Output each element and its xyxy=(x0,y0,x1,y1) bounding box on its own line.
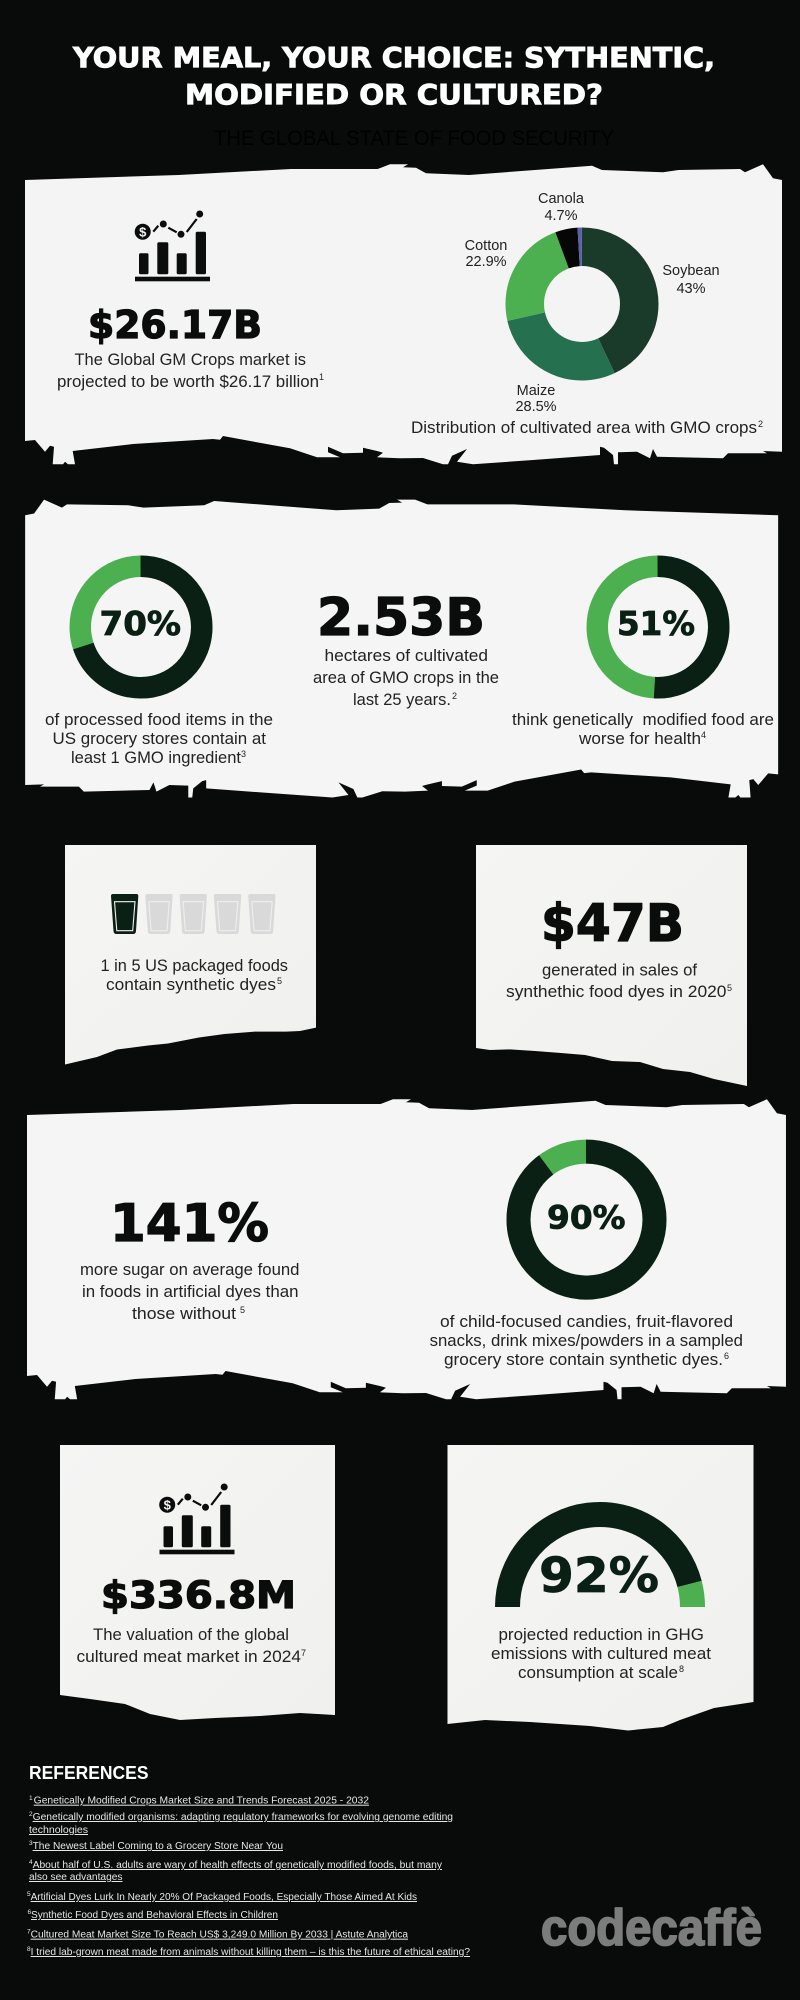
references list: Synthetic Food Dyes and Behavioral Effects in Children xyxy=(31,1910,278,1921)
icon: growth chart: $ xyxy=(139,224,147,240)
icon: growth chart: $ xyxy=(164,1498,172,1512)
panel: GM crops market xyxy=(25,164,782,464)
icon: growth chart xyxy=(135,210,210,281)
text: hectares xyxy=(313,647,499,709)
text: valuation: cultured meat market in 2024 xyxy=(76,1648,301,1666)
text: GHG: consumption at scale xyxy=(518,1664,678,1682)
chart labels: 28.5% xyxy=(515,399,557,415)
references list: 6 xyxy=(28,1909,32,1916)
text: child foods: grocery store contain synthetic dyes. xyxy=(444,1351,723,1369)
chart labels xyxy=(465,191,720,415)
text: processed food: US grocery stores contain at xyxy=(52,730,266,748)
chart labels: Soybean xyxy=(662,263,720,279)
text: market description: 1 xyxy=(319,372,324,382)
title: MODIFIED OR CULTURED? xyxy=(185,80,603,111)
text: GHG xyxy=(491,1626,711,1682)
text: processed food: 3 xyxy=(241,749,246,759)
logo: codecaffè: codecaffè xyxy=(541,1899,762,1956)
panel: synthetic dyes ratio xyxy=(65,845,316,1064)
donut: 70% xyxy=(80,566,202,688)
chart caption: 2 xyxy=(758,419,763,429)
text: market description xyxy=(57,351,324,391)
text: health perception xyxy=(512,711,774,748)
references list: 5 xyxy=(27,1891,31,1898)
references list: also see advantages xyxy=(29,1872,122,1883)
text: GHG: 8 xyxy=(679,1664,684,1674)
donut: 70%: 70% xyxy=(100,604,181,643)
donut: 51%: 51% xyxy=(617,604,695,643)
gauge: 92% xyxy=(508,1514,692,1607)
text: processed food: least 1 GMO ingredient xyxy=(71,749,241,767)
chart labels: 4.7% xyxy=(544,208,578,224)
text: packaged foods: contain synthetic dyes xyxy=(106,976,276,994)
references list: The Newest Label Coming to a Grocery Store Near You xyxy=(33,1841,283,1852)
references list: Genetically modified organisms: adapting regulatory frameworks for evolving genome editing xyxy=(33,1812,453,1823)
text: hectares: last 25 years. xyxy=(353,691,451,709)
text: market description: projected to be worth $26.17 billion xyxy=(57,373,319,391)
text: health perception: 4 xyxy=(701,730,706,740)
text: dye sales: generated in sales of xyxy=(542,962,697,980)
text: dye sales: synthethic food dyes in 2020 xyxy=(506,983,726,1001)
text: processed food xyxy=(45,711,273,767)
references list: 1 xyxy=(29,1795,33,1802)
text: dye sales xyxy=(506,962,732,1001)
subtitle: THE GLOBAL STATE OF FOOD SECURITY xyxy=(214,127,614,150)
text: hectares: area of GMO crops in the xyxy=(313,669,499,687)
text: hectares: 2 xyxy=(452,691,457,701)
icon: five cups xyxy=(111,894,276,934)
references list: 4 xyxy=(29,1859,33,1866)
chart labels: Canola xyxy=(538,191,585,207)
donut: 90%: 90% xyxy=(547,1199,626,1237)
title xyxy=(72,43,715,111)
text: hectares: hectares of cultivated xyxy=(324,647,488,665)
stat: $47B: $47B xyxy=(541,894,684,954)
chart labels: Cotton xyxy=(465,238,507,254)
chart labels: Maize xyxy=(517,383,555,399)
text: sugar: in foods in artificial dyes than xyxy=(82,1283,298,1301)
text: sugar: those without xyxy=(132,1305,236,1323)
text: packaged foods xyxy=(100,957,288,994)
text: health perception: think genetically modified food are xyxy=(512,711,774,729)
donut chart: cultivated area xyxy=(525,247,639,361)
panel: sugar and child foods xyxy=(27,1099,786,1399)
references list: I tried lab-grown meat made from animals without killing them – is this the future of ethical eating? xyxy=(31,1947,470,1958)
panel: GMO stats xyxy=(25,500,778,798)
icon: growth chart xyxy=(159,1484,234,1554)
references list: Cultured Meat Market Size To Reach US$ 3,249.0 Million By 2033 | Astute Analytica xyxy=(31,1930,408,1941)
chart labels: 22.9% xyxy=(465,254,507,270)
title: YOUR MEAL, YOUR CHOICE: SYTHENTIC, xyxy=(72,43,715,74)
text: packaged foods: 5 xyxy=(277,976,282,986)
references list: 7 xyxy=(27,1928,31,1936)
text: sugar: more sugar on average found xyxy=(80,1261,300,1279)
references list: 8 xyxy=(27,1946,31,1953)
text: sugar: 5 xyxy=(240,1305,245,1315)
text: sugar xyxy=(80,1261,300,1323)
donut: 51% xyxy=(597,566,719,688)
panel: dye sales xyxy=(476,845,747,1086)
chart caption: Distribution of cultivated area with GMO crops xyxy=(411,419,757,437)
text: child foods: snacks, drink mixes/powders in a sampled xyxy=(430,1332,743,1350)
references heading: REFERENCES xyxy=(29,1763,148,1783)
text: health perception: worse for health xyxy=(578,730,701,748)
references list: technologies xyxy=(29,1825,88,1836)
text: GHG: projected reduction in GHG xyxy=(498,1626,704,1644)
text: GHG: emissions with cultured meat xyxy=(491,1645,711,1663)
text: child foods xyxy=(430,1313,743,1369)
references list: Genetically Modified Crops Market Size and Trends Forecast 2025 - 2032 xyxy=(34,1796,369,1807)
text: market description: The Global GM Crops market is xyxy=(74,351,306,369)
chart labels: 43% xyxy=(676,281,706,297)
stat: $26.17B: $26.17B xyxy=(88,303,262,348)
donut: 90% xyxy=(518,1152,654,1288)
text: packaged foods: 1 in 5 US packaged foods xyxy=(100,957,288,975)
references list: 2 xyxy=(29,1811,33,1818)
stat: 141%: 141% xyxy=(110,1194,269,1254)
text: dye sales: 5 xyxy=(727,983,732,993)
references list: About half of U.S. adults are wary of health effects of genetically modified foods, but many xyxy=(33,1860,442,1871)
stat: 2.53B: 2.53B xyxy=(317,588,485,648)
references list xyxy=(27,1795,470,1958)
panel: GHG reduction xyxy=(448,1445,754,1730)
references list: 3 xyxy=(29,1840,33,1847)
references list: Artificial Dyes Lurk In Nearly 20% Of Packaged Foods, Especially Those Aimed At Kids xyxy=(31,1892,417,1903)
text: processed food: of processed food items in the xyxy=(45,711,273,729)
text: valuation: The valuation of the global xyxy=(93,1626,289,1644)
panel: cultured meat market xyxy=(60,1445,335,1720)
text: valuation: 7 xyxy=(301,1648,306,1658)
gauge: 92%: 92% xyxy=(539,1548,659,1604)
text: valuation xyxy=(76,1626,306,1666)
text: child foods: 6 xyxy=(724,1351,729,1361)
text: child foods: of child-focused candies, fruit-flavored xyxy=(440,1313,733,1331)
stat: $336.8M: $336.8M xyxy=(101,1574,296,1617)
